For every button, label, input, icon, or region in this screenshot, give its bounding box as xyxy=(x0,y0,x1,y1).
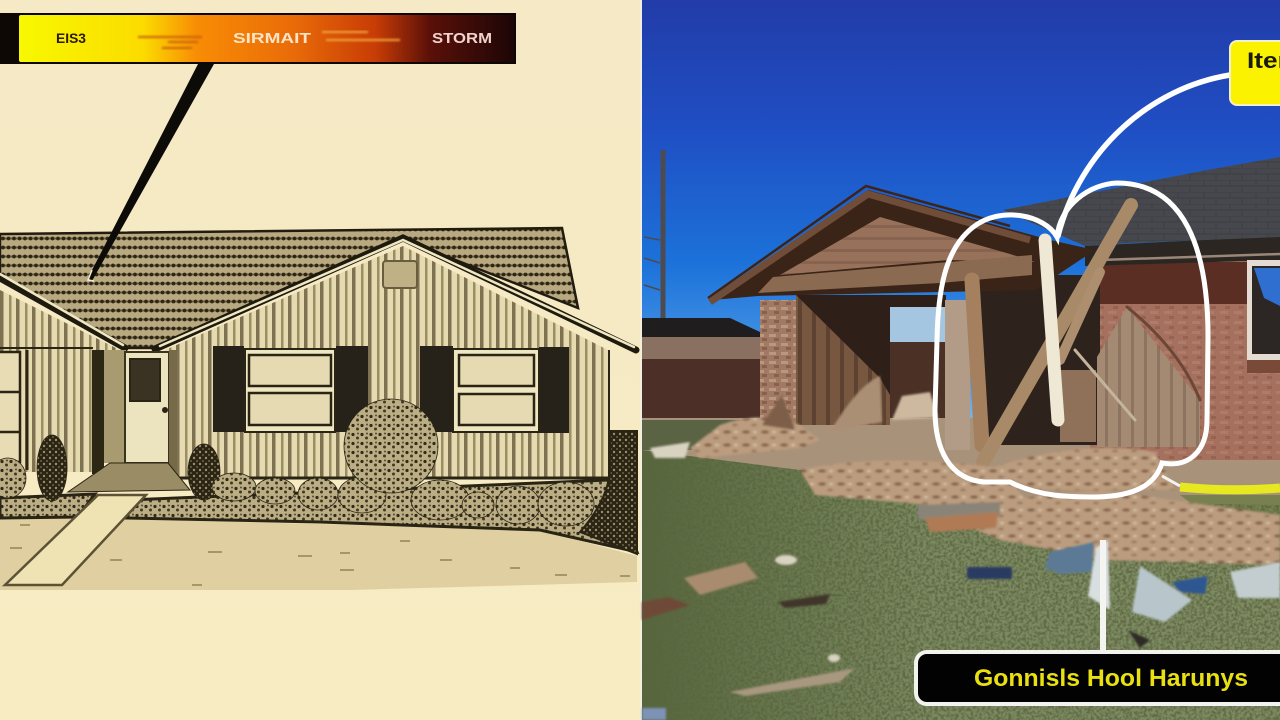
scattered debris on lawn xyxy=(642,442,1280,720)
garden bed xyxy=(0,480,637,552)
right house wall xyxy=(1090,255,1280,460)
porch step xyxy=(68,463,190,492)
carport structure xyxy=(760,275,1200,450)
label: low end: EIS3 xyxy=(56,30,86,46)
main roof xyxy=(0,228,578,348)
pavement and ground xyxy=(642,418,1280,510)
front door xyxy=(92,350,177,474)
walkway xyxy=(5,495,146,585)
window with shutters 2 xyxy=(420,346,569,433)
shrubs xyxy=(0,399,594,526)
label: storm: STORM xyxy=(432,30,492,47)
far building and fence xyxy=(642,306,947,422)
dark band under eave xyxy=(1085,236,1280,304)
house walls with vertical siding xyxy=(0,246,609,478)
ground: front lawn xyxy=(0,516,637,590)
flame streaks xyxy=(138,32,400,48)
yellow caution tape xyxy=(1162,476,1280,490)
panel: before, sketched house xyxy=(0,0,640,720)
carport gable xyxy=(708,186,1095,302)
panel: after, damaged house photo xyxy=(640,0,1280,720)
gable vent xyxy=(383,261,417,288)
lawn xyxy=(642,420,1280,720)
slate roof xyxy=(1003,157,1280,246)
roof pointer line xyxy=(88,64,214,281)
window left gable xyxy=(0,350,27,470)
severity scale bar xyxy=(0,13,516,64)
gable trim xyxy=(0,238,636,350)
top label xyxy=(1230,41,1280,105)
bottom label: Gonnisls Hool Harunys xyxy=(974,665,1248,692)
right side hedge xyxy=(580,431,637,554)
window with shutters 1 xyxy=(213,346,368,432)
debris piles xyxy=(690,376,1280,565)
utility pole xyxy=(644,150,663,320)
bottom label xyxy=(916,652,1280,704)
side window with blue tarp xyxy=(1247,260,1280,373)
leader line to top label xyxy=(1058,75,1230,236)
label: middle: SIRMAIT xyxy=(233,30,311,47)
damage highlight outline xyxy=(935,183,1208,497)
leader line to bottom label xyxy=(1100,540,1106,652)
collapsed timber xyxy=(972,205,1200,462)
